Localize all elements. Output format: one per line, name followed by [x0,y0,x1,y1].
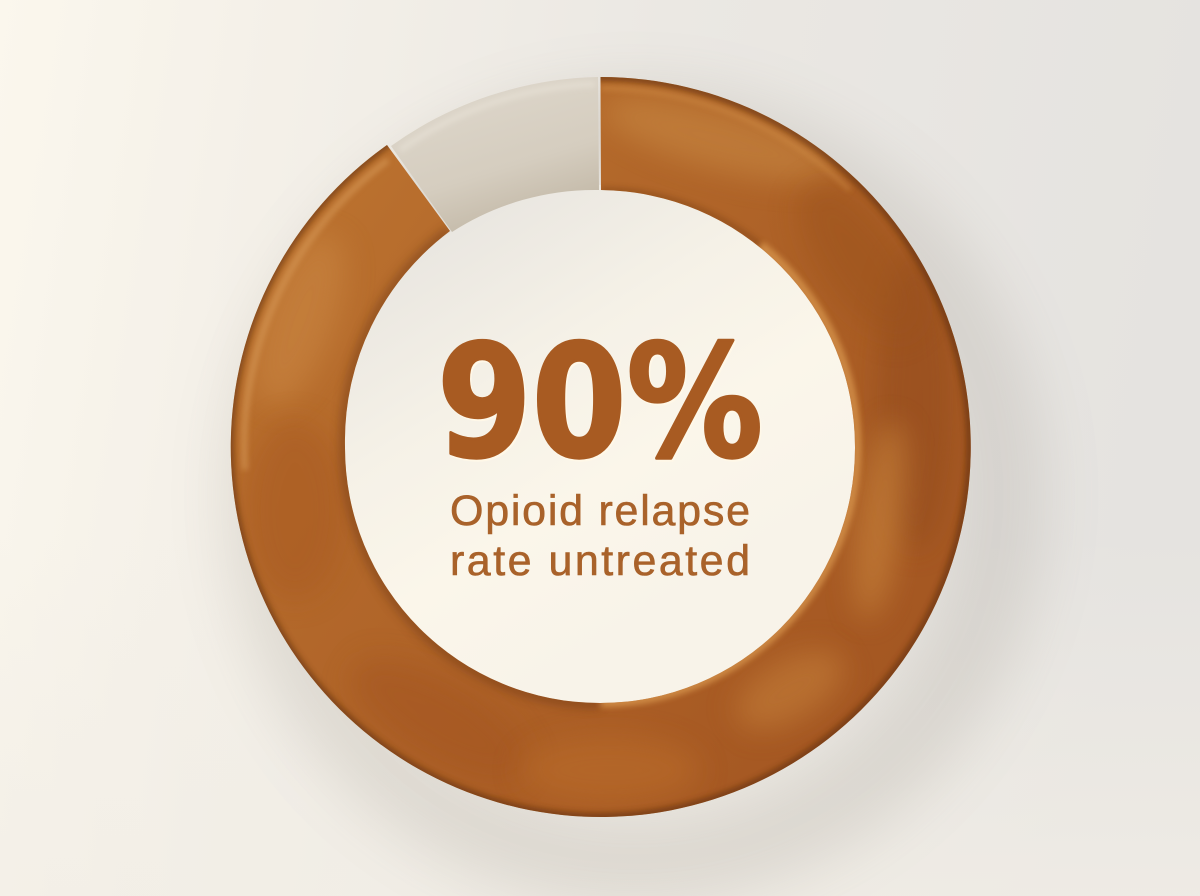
centre opening [338,185,862,709]
segment: 90 percent brown [230,77,971,817]
caption: Opioid relapse rate untreated: rate untreated [450,537,750,585]
stat: 90%: 90% [437,311,763,493]
segment: 10 percent beige [391,77,599,232]
donut chart: 90 percent ring [230,77,971,817]
caption: Opioid relapse rate untreated: Opioid relapse [450,487,750,535]
ring cast shadow [270,130,1000,860]
stat: 90%: 90% [438,313,764,495]
caption: Opioid relapse rate untreated [450,487,750,585]
